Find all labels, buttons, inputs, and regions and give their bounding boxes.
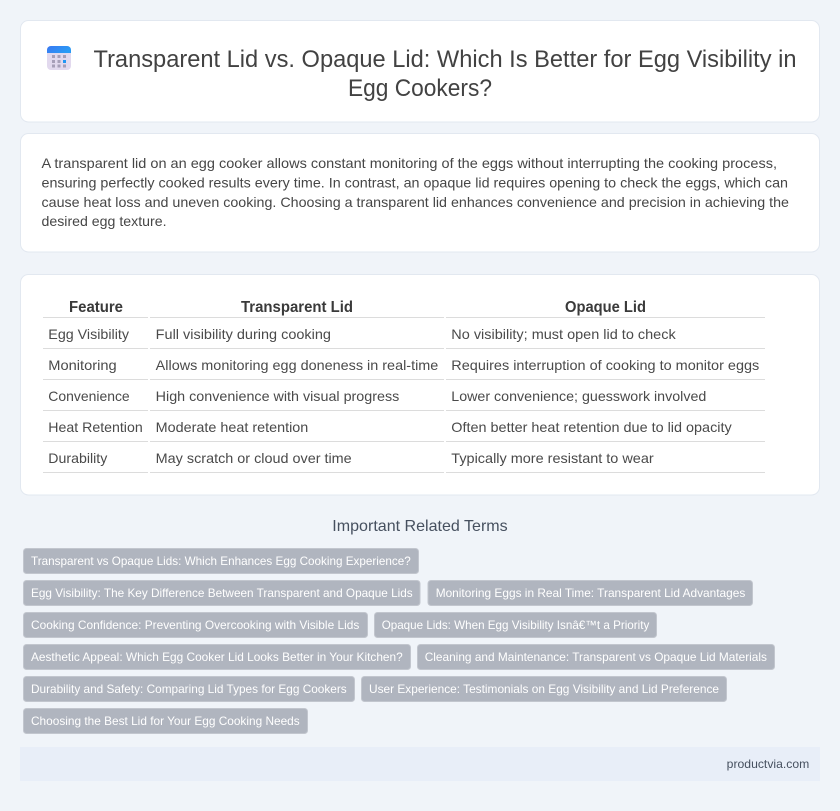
- table row: heat retention: Often better heat retention due to lid opacity: [451, 419, 732, 435]
- footer source text: productvia.com: [727, 757, 809, 771]
- tag: Egg Visibility: The Key Difference Between Transparent and Opaque Lids: [31, 586, 413, 600]
- tag: [24, 676, 354, 702]
- tag: Monitoring Eggs in Real Time: Transparent Lid Advantages: [436, 586, 745, 600]
- tag list: [24, 548, 774, 734]
- text block: intro paragraph: desired egg texture.: [42, 213, 166, 229]
- tag: Aesthetic Appeal: Which Egg Cooker Lid Looks Better in Your Kitchen?: [31, 650, 403, 664]
- table header row: Opaque Lid: [565, 299, 646, 316]
- table row: convenience: High convenience with visual progress: [156, 388, 399, 404]
- panel: intro: [20, 134, 820, 252]
- table row: egg visibility: [48, 326, 677, 342]
- table row: heat retention: [48, 419, 732, 435]
- tag: Durability and Safety: Comparing Lid Types for Egg Cookers: [31, 682, 347, 696]
- table row: convenience: Lower convenience; guesswork involved: [451, 388, 706, 404]
- tag: Cleaning and Maintenance: Transparent vs Opaque Lid Materials: [425, 650, 767, 664]
- tag: [418, 644, 774, 670]
- table row: durability: [48, 450, 654, 466]
- heading: important related terms: Important Related Terms: [332, 518, 508, 535]
- tag: [24, 548, 418, 574]
- text block: intro paragraph: A transparent lid on an egg cooker allows constant monitoring of the eggs without interrupting the cooking process,: [42, 155, 777, 171]
- panel: comparison table: [20, 274, 820, 495]
- table row: durability: Durability: [48, 450, 107, 466]
- text block: intro paragraph: ensuring perfectly cooked results every time. In contrast, an opaque lid requires opening to check the eggs, which can: [42, 174, 788, 190]
- tag: [362, 676, 726, 702]
- table row: monitoring: Monitoring: [48, 357, 117, 373]
- table row: egg visibility: Egg Visibility: [48, 326, 129, 342]
- title: [94, 46, 796, 102]
- tag: [374, 612, 656, 638]
- tag: Opaque Lids: When Egg Visibility Isnâ€™t a Priority: [382, 618, 649, 632]
- table header row: Feature: [69, 299, 123, 316]
- table row: egg visibility: Full visibility during cooking: [156, 326, 331, 342]
- footer: [20, 747, 820, 781]
- table row: monitoring: Allows monitoring egg doneness in real-time: [156, 357, 439, 373]
- tag: Choosing the Best Lid for Your Egg Cooking Needs: [31, 714, 300, 728]
- table header row: [69, 299, 646, 316]
- table row: egg visibility: No visibility; must open lid to check: [451, 326, 677, 342]
- table row: heat retention: Moderate heat retention: [156, 419, 308, 435]
- tag: Cooking Confidence: Preventing Overcooking with Visible Lids: [31, 618, 359, 632]
- tag: [24, 708, 308, 734]
- table row: convenience: Convenience: [48, 388, 130, 404]
- tag: [428, 580, 752, 606]
- table row: monitoring: Requires interruption of cooking to monitor eggs: [451, 357, 759, 373]
- icon: calendar: [47, 46, 71, 70]
- tag: [24, 580, 420, 606]
- text block: intro paragraph: cause heat loss and uneven cooking. Choosing a transparent lid enhances convenience and precision in achieving the: [42, 194, 789, 210]
- table row: convenience: [48, 388, 706, 404]
- table header row: Transparent Lid: [241, 299, 353, 316]
- tag: [24, 644, 410, 670]
- table row: durability: Typically more resistant to wear: [451, 450, 654, 466]
- tag: User Experience: Testimonials on Egg Visibility and Lid Preference: [369, 682, 719, 696]
- table row: heat retention: Heat Retention: [48, 419, 143, 435]
- text block: intro paragraph: [42, 155, 789, 229]
- tag: [24, 612, 368, 638]
- title: Transparent Lid vs. Opaque Lid: Which Is Better for Egg Visibility in: [94, 46, 796, 73]
- panel: header: [20, 20, 820, 122]
- title: Egg Cookers?: [348, 75, 492, 102]
- table row: monitoring: [48, 357, 759, 373]
- table row: durability: May scratch or cloud over time: [156, 450, 352, 466]
- tag: Transparent vs Opaque Lids: Which Enhances Egg Cooking Experience?: [31, 554, 411, 568]
